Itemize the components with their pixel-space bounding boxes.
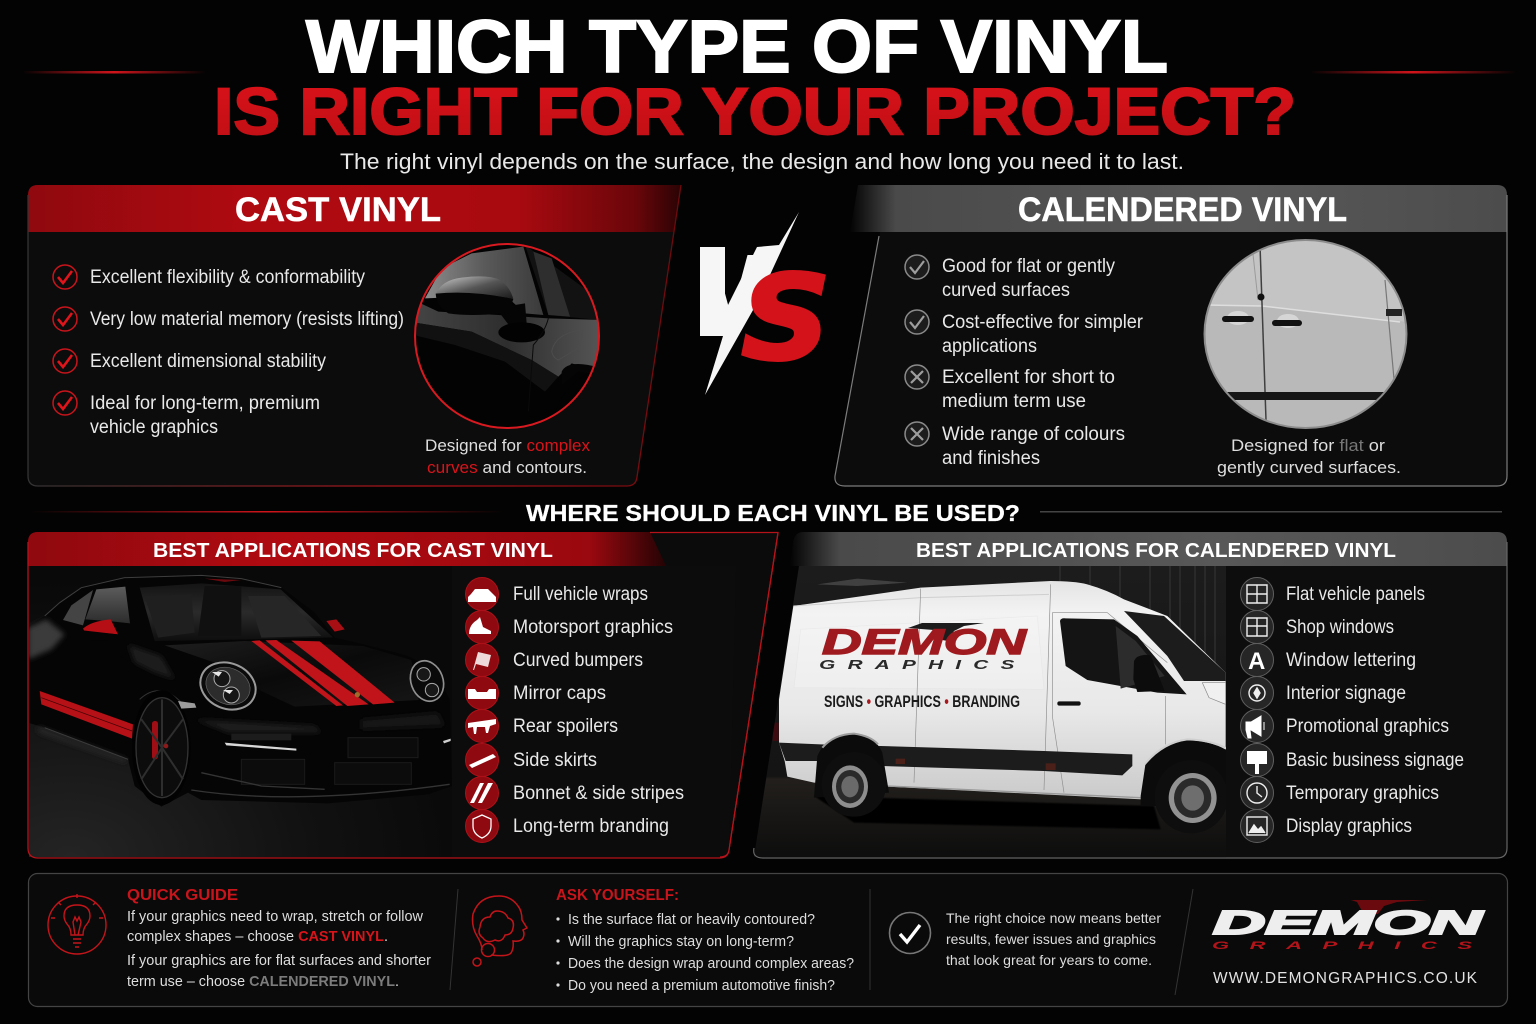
cast vinyl close-up image: mirror [413, 244, 602, 435]
van logo: DEMON [822, 623, 1027, 662]
car image [28, 566, 452, 858]
cast list labels: Bonnet & side stripes [513, 783, 684, 804]
cast vinyl heading: CAST VINYL [235, 191, 441, 229]
panel: best applications for calendered vinyl [750, 532, 1507, 858]
calendered vinyl benefits list: applications [942, 336, 1037, 357]
calendered list labels: Basic business signage [1286, 750, 1464, 771]
calendered vinyl caption [1217, 436, 1401, 477]
calendered vinyl caption: gently curved surfaces. [1217, 458, 1401, 477]
car body [29, 637, 393, 806]
van image [750, 566, 1231, 858]
VS emblem [700, 212, 831, 395]
calendered vinyl benefits list: and finishes [942, 448, 1040, 469]
windshield [1124, 611, 1226, 681]
calendered vinyl benefits list: Cost-effective for simpler [942, 312, 1144, 333]
panel: calendered vinyl [835, 185, 1507, 486]
letter S: S [741, 249, 831, 387]
cast vinyl caption: Designed for complex [425, 436, 590, 455]
ask yourself text: Is the surface flat or heavily contoured? [568, 911, 815, 928]
icon: flag [473, 652, 491, 670]
ask yourself text: Does the design wrap around complex areas? [568, 955, 854, 972]
icon: motorsport [469, 617, 491, 634]
icon: light bulb [48, 894, 106, 954]
cast vinyl benefits list: Excellent dimensional stability [90, 351, 326, 372]
calendered vinyl heading: CALENDERED VINYL [1018, 191, 1347, 229]
calendered vinyl header [850, 185, 1507, 232]
Demon Graphics logo [1212, 900, 1485, 987]
icon: stripes [470, 783, 493, 803]
left mirror [83, 619, 118, 634]
body highlights [28, 619, 445, 763]
calendered applications header [790, 532, 1507, 566]
icon: letter A: A [1248, 648, 1265, 675]
icon: compass [1249, 685, 1265, 701]
letter V: V [700, 232, 762, 355]
title line one: WHICH TYPE OF VINYL [306, 5, 1168, 88]
icon: picture [1247, 817, 1267, 835]
cast applications header [28, 532, 666, 566]
cast list labels: Mirror caps [513, 683, 606, 704]
calendered vinyl benefits list: Wide range of colours [942, 424, 1125, 445]
closing statement [946, 910, 1161, 968]
cast list labels: Curved bumpers [513, 650, 643, 671]
quick guide text: If your graphics are for flat surfaces and shorter [127, 952, 431, 969]
icon: clock [1247, 783, 1267, 803]
cast list labels: Long-term branding [513, 816, 669, 837]
door seams [914, 584, 1167, 793]
calendered list labels: Promotional graphics [1286, 716, 1449, 737]
calendered list labels: Interior signage [1286, 683, 1406, 704]
icon: megaphone [1246, 716, 1264, 738]
quick guide text: term use – choose CALENDERED VINYL. [127, 973, 399, 990]
title [22, 5, 1516, 148]
ask yourself text: Do you need a premium automotive finish? [568, 977, 835, 994]
van logo [819, 623, 1027, 711]
cast list labels: Full vehicle wraps [513, 584, 648, 605]
cast applications list [452, 533, 778, 857]
panel: best applications for cast vinyl [28, 532, 778, 858]
lights and grille [225, 743, 296, 751]
ask yourself text: Will the graphics stay on long-term? [568, 933, 794, 950]
right mirror [326, 619, 345, 632]
icon: side skirt [469, 754, 496, 768]
calendered list labels: Temporary graphics [1286, 783, 1439, 804]
side windows [63, 590, 93, 625]
calendered list labels: Flat vehicle panels [1286, 584, 1425, 605]
calendered list labels: Window lettering [1286, 650, 1416, 671]
cast vinyl benefits list: vehicle graphics [90, 417, 218, 438]
front wheel [1156, 806, 1226, 826]
cast list labels [513, 584, 684, 837]
rear arch [814, 734, 889, 798]
quick guide text: complex shapes – choose CAST VINYL. [127, 928, 388, 945]
section heading: where should each vinyl be used: WHERE SHOULD EACH VINYL BE USED? [526, 500, 1020, 526]
van logo: SIGNS • GRAPHICS • BRANDING [824, 692, 1020, 711]
van body [779, 581, 1226, 799]
title line two: IS RIGHT FOR YOUR PROJECT? [214, 74, 1296, 148]
calendered applications list [1240, 578, 1464, 842]
bonnet stripes [251, 640, 395, 706]
quick guide text: If your graphics need to wrap, stretch or follow [127, 908, 423, 925]
icon: thinking head [472, 896, 527, 966]
calendered vinyl caption: Designed for flat or [1231, 436, 1385, 455]
lightning bolt [700, 212, 799, 395]
website: WWW.DEMONGRAPHICS.CO.UK [1213, 970, 1478, 987]
side window [1060, 618, 1187, 694]
calendered list labels [1286, 584, 1464, 837]
cast vinyl benefits list: Excellent flexibility & conformability [90, 267, 365, 288]
front arch [1141, 740, 1231, 806]
rear lamp [773, 723, 779, 741]
panel: cast vinyl [28, 185, 681, 486]
icon: spoiler [468, 719, 496, 734]
subtitle: The right vinyl depends on the surface, the design and how long you need it to last. [340, 149, 1184, 174]
calendered vinyl benefits list: Good for flat or gently [942, 256, 1115, 277]
cast applications heading: BEST APPLICATIONS FOR CAST VINYL [153, 539, 553, 562]
cast list labels: Side skirts [513, 750, 597, 771]
icon: shop window [1247, 618, 1267, 636]
Demon Graphics logo: DEMON [1213, 904, 1485, 941]
calendered vinyl benefits list: Excellent for short to [942, 367, 1115, 388]
door handle [1057, 701, 1081, 706]
van rub strip [779, 743, 1132, 775]
icon: check circle [890, 912, 930, 954]
headlights [199, 661, 257, 711]
front wheel [143, 690, 176, 805]
icon: shield [473, 815, 491, 838]
icon: car [468, 589, 496, 602]
calendered vinyl benefits list: medium term use [942, 391, 1086, 412]
side stripe [40, 691, 133, 739]
cast vinyl benefits list: Ideal for long-term, premium [90, 393, 320, 414]
closing statement: The right choice now means better [946, 910, 1161, 926]
van mirror [1133, 655, 1165, 692]
cast list labels: Motorsport graphics [513, 617, 673, 638]
cast vinyl header [28, 185, 681, 232]
cast list labels: Rear spoilers [513, 716, 618, 737]
cast vinyl caption: curves and contours. [427, 458, 587, 477]
calendered vinyl benefits list: curved surfaces [942, 280, 1070, 301]
van shadow [814, 796, 1161, 829]
calendered list labels: Display graphics [1286, 816, 1412, 837]
van logo: GRAPHICS [819, 657, 1015, 672]
panel: bottom guide bar [28, 874, 1508, 1006]
calendered vinyl benefits list [905, 255, 1144, 469]
closing statement: that look great for years to come. [946, 952, 1152, 968]
icon: bumper [468, 689, 496, 699]
ask yourself text [556, 887, 854, 994]
cast vinyl caption [425, 436, 590, 477]
sill highlight [887, 786, 1141, 798]
calendered applications heading: BEST APPLICATIONS FOR CALENDERED VINYL [916, 539, 1396, 562]
ask yourself text: ASK YOURSELF: [556, 887, 679, 904]
quick guide text: QUICK GUIDE [127, 887, 238, 904]
icon: sign [1247, 751, 1267, 774]
calendered vinyl close-up image: van door [1204, 240, 1408, 430]
cast vinyl benefits list: Very low material memory (resists lifting) [90, 309, 404, 330]
icon: flat panel [1247, 585, 1267, 603]
windshield [140, 583, 333, 641]
rear wheel [824, 793, 885, 816]
sill line [45, 728, 128, 759]
cast vinyl benefits list [53, 265, 404, 438]
Demon Graphics logo: GRAPHICS [1212, 939, 1473, 952]
quick guide text [127, 887, 431, 990]
closing statement: results, fewer issues and graphics [946, 931, 1156, 947]
calendered list labels: Shop windows [1286, 617, 1394, 638]
